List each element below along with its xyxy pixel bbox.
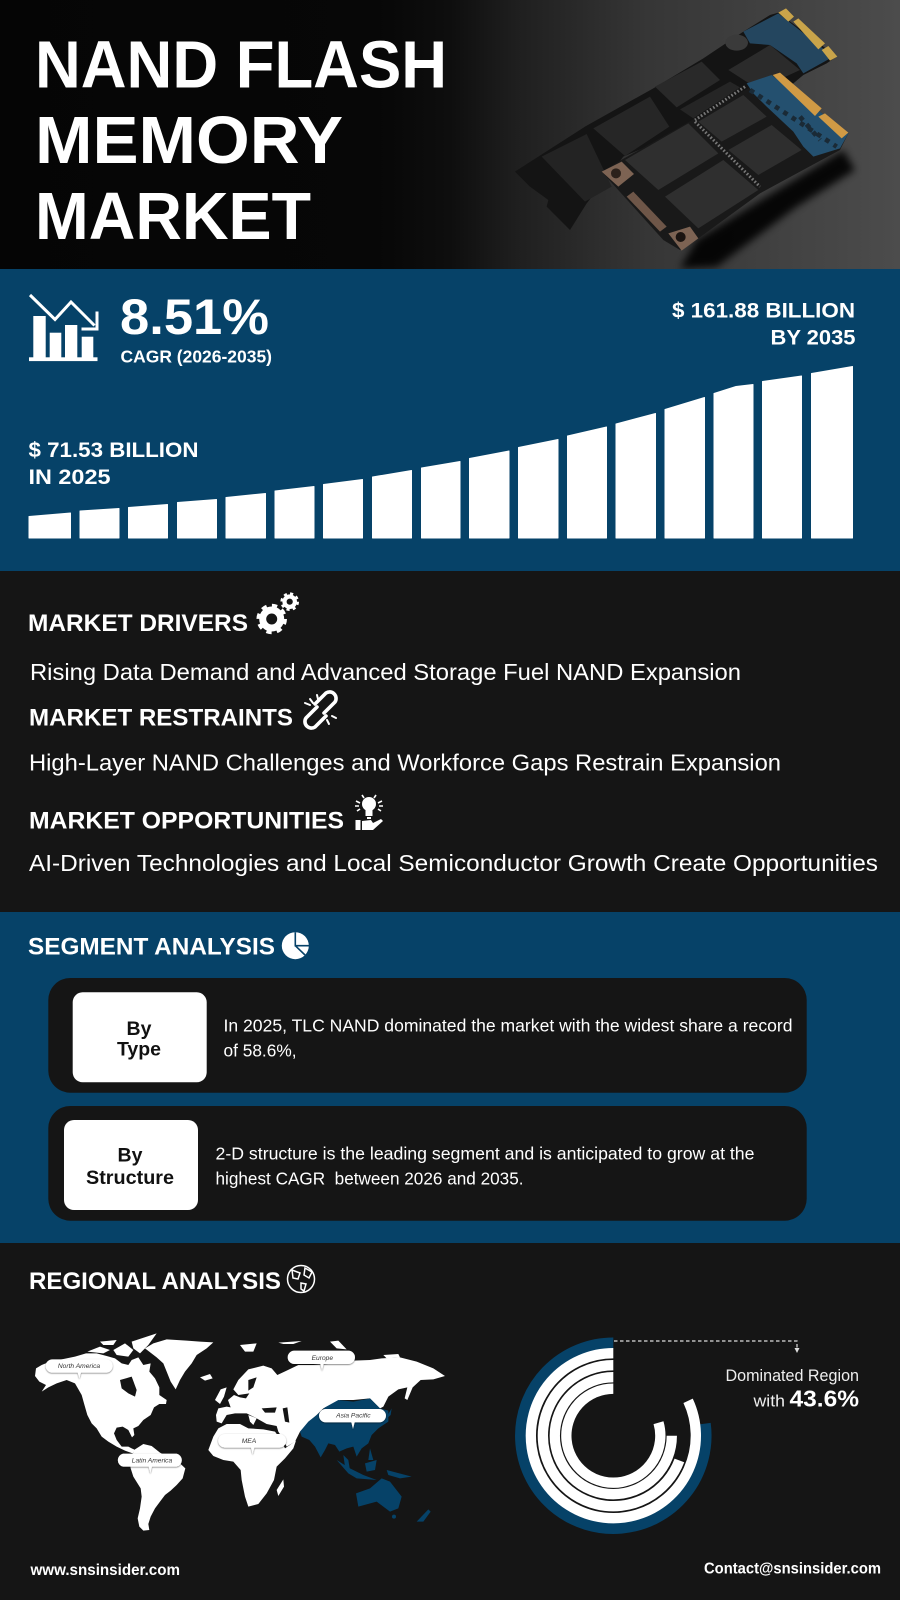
panel: drivers, restraints, opportunities xyxy=(0,571,900,912)
map: Asia Pacific highlighted xyxy=(300,1398,431,1522)
footer: contact email: Contact@snsinsider.com xyxy=(704,1560,881,1577)
callout: North America: North America xyxy=(58,1363,100,1370)
bar chart: market growth xyxy=(29,366,852,538)
icon: globe xyxy=(288,1266,314,1292)
footer: website: www.snsinsider.com xyxy=(30,1562,180,1579)
callout: North America xyxy=(46,1359,113,1379)
2035 value: $ 161.88 BILLION xyxy=(672,298,855,322)
heading: market restraints: MARKET RESTRAINTS xyxy=(29,704,293,731)
2025 value: $ 71.53 BILLION xyxy=(28,438,199,462)
text: structure finding xyxy=(216,1144,754,1188)
callout: Europe: Europe xyxy=(312,1355,333,1362)
callout: dominated region share: Dominated Region xyxy=(726,1366,859,1385)
callout: Latin America: Latin America xyxy=(132,1458,173,1465)
label: by type: Type xyxy=(117,1039,161,1061)
heading: market opportunities: MARKET OPPORTUNITIES xyxy=(29,808,344,835)
label: by structure: By xyxy=(118,1145,143,1167)
map: americas, europe, africa xyxy=(35,1333,445,1531)
2035 value: BY 2035 xyxy=(770,326,856,350)
icon: broken chain xyxy=(305,692,336,728)
icon: bar chart with trend arrow xyxy=(29,295,98,361)
icon: lightbulb over hand xyxy=(355,795,383,830)
text: opportunities summary: AI-Driven Technologies and Local Semiconductor Growth Create Opportunities xyxy=(29,850,878,876)
text: drivers summary: Rising Data Demand and Advanced Storage Fuel NAND Expansion xyxy=(30,659,741,685)
heading: segment analysis: SEGMENT ANALYSIS xyxy=(28,933,275,960)
header photo: SSD circuit boards xyxy=(515,8,855,268)
heading: market drivers: MARKET DRIVERS xyxy=(28,610,248,637)
card: by structure xyxy=(48,1106,807,1221)
text: type finding: of 58.6%, xyxy=(224,1041,296,1061)
world map xyxy=(35,1333,445,1531)
text: structure finding: highest CAGR between 2026 and 2035. xyxy=(216,1168,524,1188)
callout: Latin America xyxy=(118,1454,182,1473)
text: type finding: In 2025, TLC NAND dominated the market with the widest share a record xyxy=(224,1016,793,1036)
callout: dominated region share: 43.6% xyxy=(790,1386,859,1412)
text: structure finding: 2-D structure is the leading segment and is anticipated to grow at the xyxy=(216,1144,754,1164)
callout: Asia Pacific: Asia Pacific xyxy=(335,1413,371,1420)
arrow: dashed leader line xyxy=(614,1341,800,1353)
2035 value xyxy=(672,298,856,350)
callout: Asia Pacific xyxy=(319,1409,386,1429)
header banner xyxy=(0,0,900,269)
title: NAND FLASH xyxy=(35,28,447,102)
icon: pie chart xyxy=(282,932,309,959)
callout: dominated region share: with xyxy=(752,1392,785,1411)
heading: regional analysis: REGIONAL ANALYSIS xyxy=(29,1268,281,1295)
callout: dominated region share xyxy=(726,1366,859,1412)
2025 value: IN 2025 xyxy=(28,465,111,489)
icon: gears xyxy=(258,594,298,632)
panel: segment analysis xyxy=(0,912,900,1243)
callout: Europe xyxy=(288,1351,355,1371)
callout: MEA: MEA xyxy=(242,1438,257,1445)
2025 value xyxy=(28,438,199,489)
panel: regional analysis xyxy=(0,1243,900,1600)
label: by type xyxy=(73,992,207,1082)
callout: MEA xyxy=(218,1434,286,1454)
label: by structure xyxy=(64,1120,198,1210)
map: water cutouts xyxy=(120,1377,289,1423)
title: MEMORY xyxy=(35,103,343,178)
text: restraints summary: High-Layer NAND Challenges and Workforce Gaps Restrain Expansion xyxy=(29,750,781,776)
label: by structure: Structure xyxy=(86,1167,174,1189)
title xyxy=(35,28,447,254)
label: by type: By xyxy=(127,1018,152,1040)
panel: market size xyxy=(0,269,900,571)
card: by type xyxy=(48,978,807,1093)
text: type finding xyxy=(224,1016,793,1061)
CAGR value: 8.51% xyxy=(120,289,269,345)
CAGR label: CAGR (2026-2035) xyxy=(120,347,272,367)
radial bar chart: dominated region xyxy=(521,1343,706,1528)
title: MARKET xyxy=(35,179,311,254)
